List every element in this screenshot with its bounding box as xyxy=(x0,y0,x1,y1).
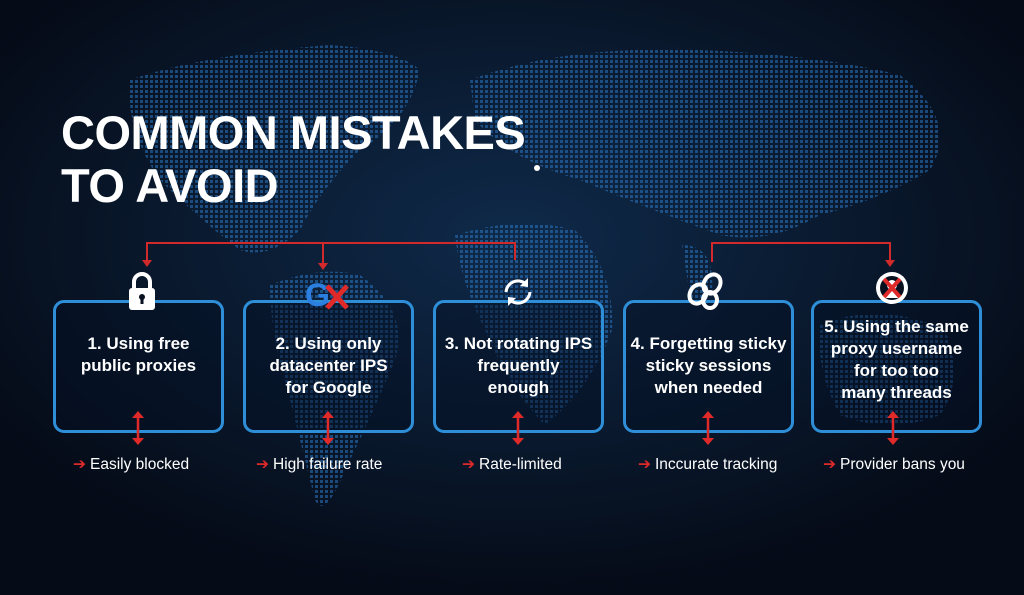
panel 5: many threads xyxy=(841,383,952,402)
icon: chain xyxy=(687,272,723,310)
panel 4: 4. Forgetting sticky xyxy=(631,334,786,353)
panel 1: public proxies xyxy=(81,356,196,375)
panel 2: datacenter IPS xyxy=(269,356,388,375)
panel 5 xyxy=(811,300,982,433)
panel 3: enough xyxy=(488,378,549,397)
panel 2 xyxy=(243,300,414,433)
outcome 1: ➔ Easily blocked xyxy=(73,456,189,473)
icon: banned user xyxy=(876,272,908,304)
title: COMMON MISTAKES xyxy=(61,106,525,159)
panel 1 xyxy=(53,300,224,433)
icon: rotate xyxy=(504,278,532,306)
icon: google x: G xyxy=(305,277,330,313)
outcome 4: ➔ Inccurate tracking xyxy=(638,456,777,473)
outcome 2: ➔ High failure rate xyxy=(256,456,382,473)
panel 4 xyxy=(623,300,794,433)
panel 4: when needed xyxy=(655,378,762,397)
panel 3: 3. Not rotating IPS xyxy=(445,334,592,353)
icon: lock xyxy=(129,272,155,310)
outcome 3: ➔ Rate-limited xyxy=(462,456,562,473)
panel 2: for Google xyxy=(286,378,371,397)
panel 3: frequently xyxy=(477,356,560,375)
outcome 5: ➔ Provider bans you xyxy=(823,456,965,473)
panel 2: 2. Using only xyxy=(276,334,381,353)
panel 4: sticky sessions xyxy=(646,356,771,375)
title xyxy=(61,106,525,212)
title: TO AVOID xyxy=(61,159,278,212)
icon: google x xyxy=(305,277,349,313)
panel 5: 5. Using the same xyxy=(824,317,969,336)
panel 1: 1. Using free xyxy=(87,334,190,353)
panel 5: proxy username xyxy=(831,339,962,358)
panel 3 xyxy=(433,300,604,433)
panel 5: for too too xyxy=(854,361,939,380)
